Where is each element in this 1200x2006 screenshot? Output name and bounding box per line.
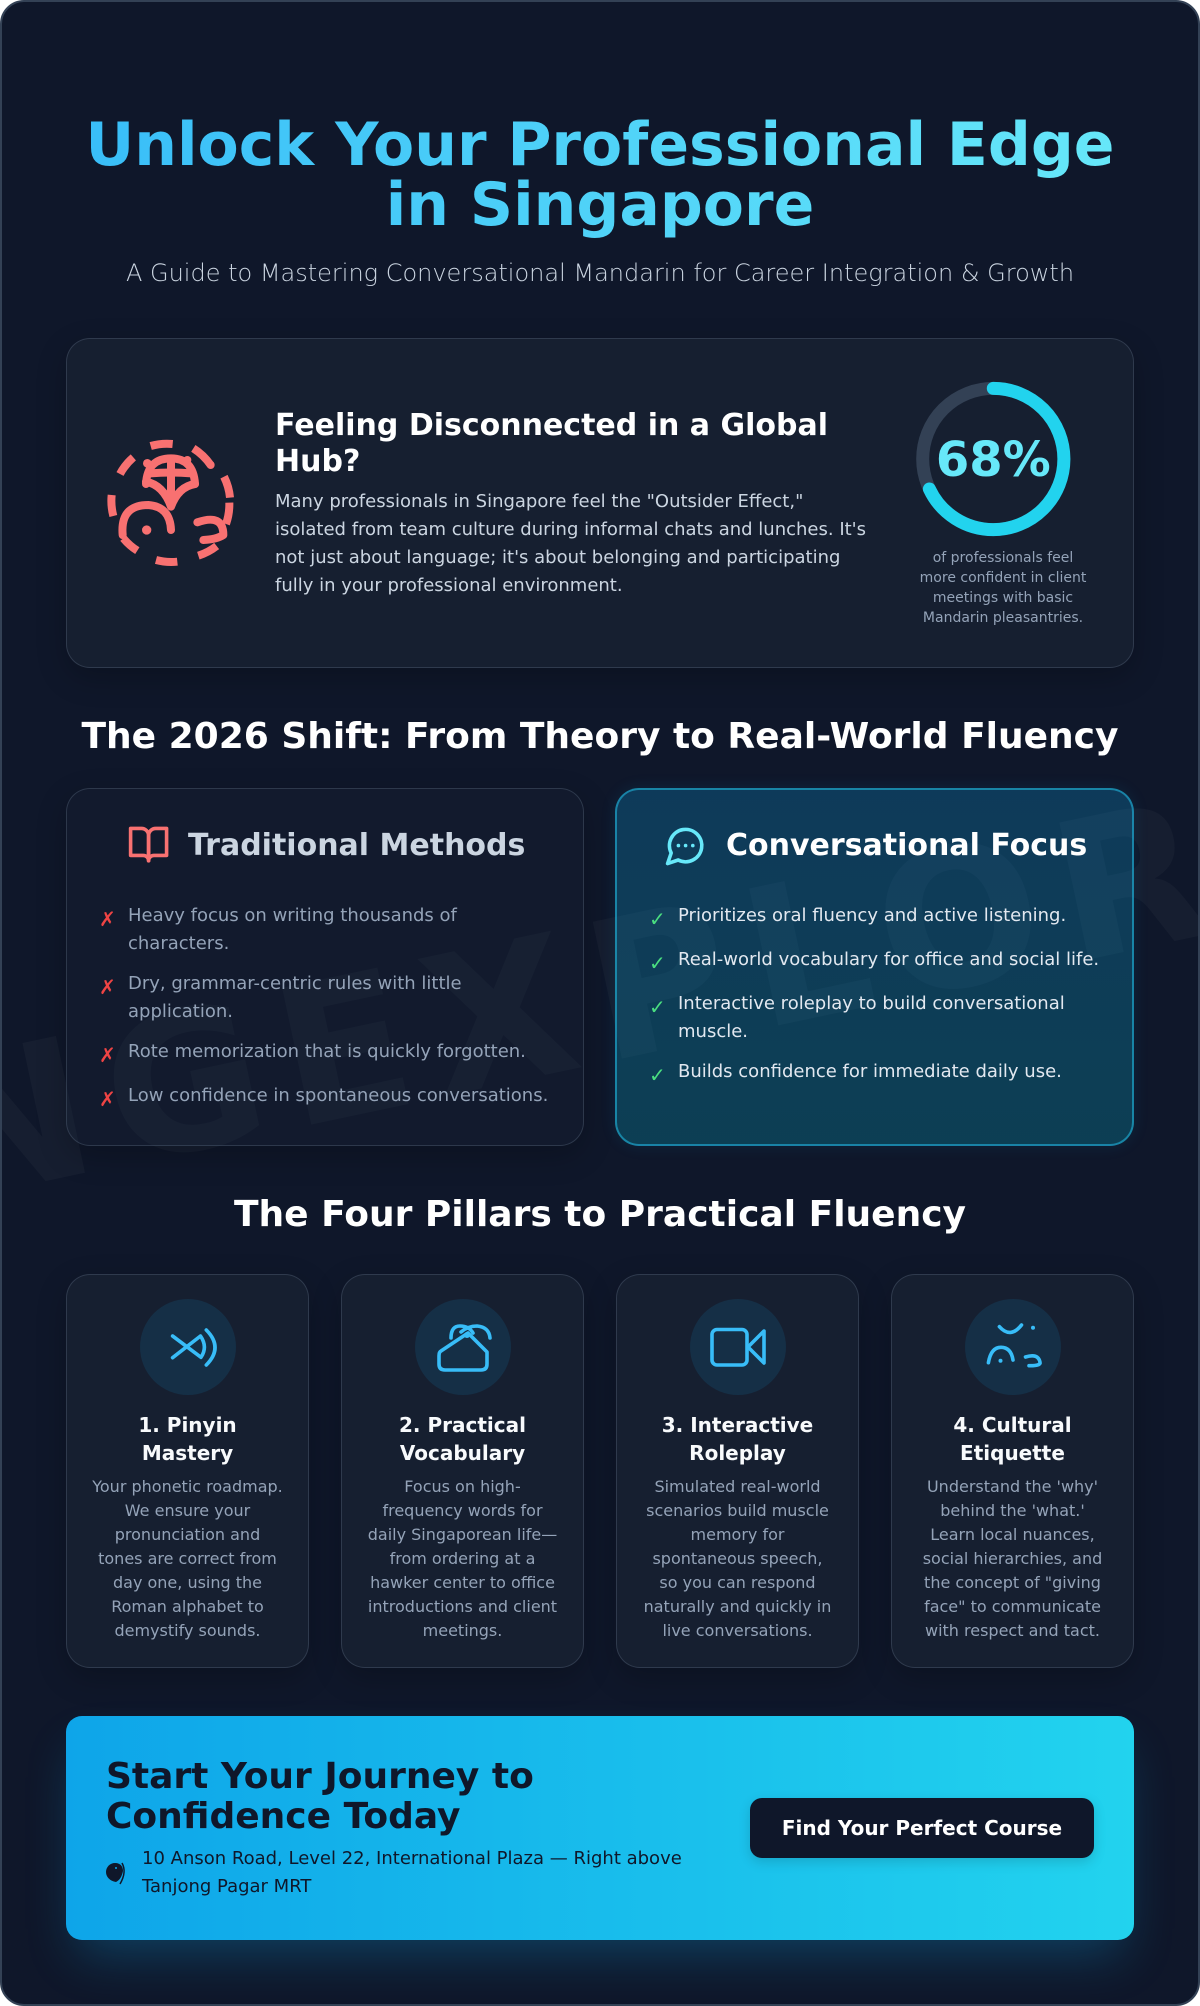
- CTA heading: [106, 1756, 534, 1837]
- pillar 2 text: introductions and client: [368, 1597, 557, 1616]
- icon circle 3: [690, 1299, 786, 1395]
- pillar 3 text: memory for: [691, 1525, 784, 1544]
- pillar 2 text: Focus on high-: [404, 1477, 521, 1496]
- pillar 3 title: 3. Interactive: [662, 1413, 813, 1437]
- pillar 1 title: [138, 1413, 237, 1465]
- panel heading: [275, 408, 828, 479]
- CTA heading: Start Your Journey to: [106, 1756, 534, 1797]
- pillar 1 text: We ensure your: [125, 1501, 250, 1520]
- button: find course: Find Your Perfect Course: [782, 1816, 1062, 1840]
- icon circle 2: [414, 1299, 510, 1395]
- icon: location pin: [106, 1862, 125, 1884]
- list: traditional drawbacks: ✗: [99, 907, 116, 931]
- list: traditional drawbacks: application.: [128, 1001, 233, 1022]
- icon circle 4: [964, 1299, 1060, 1395]
- panel: conversational focus: [615, 788, 1134, 1146]
- pillar 3 text: so you can respond: [659, 1573, 816, 1592]
- list: traditional drawbacks: ✗: [99, 975, 116, 999]
- list: traditional drawbacks: Rote memorization that is quickly forgotten.: [128, 1041, 526, 1062]
- pillar 1 text: Your phonetic roadmap.: [92, 1477, 283, 1496]
- list: conversational benefits: ✓: [649, 907, 666, 931]
- progress ring: 68%: [916, 382, 1070, 536]
- statistic caption: meetings with basic: [933, 590, 1073, 606]
- panel paragraph: not just about language; it's about belonging and participating: [275, 547, 840, 568]
- pillar 3 text: live conversations.: [662, 1621, 813, 1640]
- pillar 4 text: Learn local nuances,: [930, 1525, 1095, 1544]
- icon: disconnected people: [107, 440, 234, 566]
- list: conversational benefits: ✓: [649, 1063, 666, 1087]
- list: traditional drawbacks: [99, 905, 548, 1111]
- title: [66, 115, 1134, 249]
- pillar 3 title: Roleplay: [689, 1441, 786, 1465]
- pillar 4 text: behind the 'what.': [940, 1501, 1085, 1520]
- call to action banner: [66, 1716, 1134, 1940]
- list: conversational benefits: ✓: [649, 951, 666, 975]
- panel heading: Feeling Disconnected in a Global: [275, 408, 828, 443]
- list: conversational benefits: Prioritizes oral fluency and active listening.: [678, 905, 1066, 926]
- pillar 2 text: hawker center to office: [370, 1573, 555, 1592]
- heading: the 2026 shift: The 2026 Shift: From Theory to Real-World Fluency: [81, 716, 1118, 757]
- panel paragraph: Many professionals in Singapore feel the "Outsider Effect,": [275, 491, 803, 512]
- statistic caption: more confident in client: [920, 570, 1086, 586]
- pillar 4 text: face" to communicate: [924, 1597, 1101, 1616]
- address: [142, 1848, 682, 1897]
- statistic caption: [920, 550, 1086, 626]
- list: conversational benefits: Real-world vocabulary for office and social life.: [678, 949, 1099, 970]
- statistic caption: Mandarin pleasantries.: [923, 610, 1083, 626]
- subtitle: A Guide to Mastering Conversational Mandarin for Career Integration & Growth: [126, 259, 1074, 287]
- pillar 2 title: 2. Practical: [399, 1413, 526, 1437]
- pillar 2 text: daily Singaporean life—: [368, 1525, 557, 1544]
- pillar 3 text: scenarios build muscle: [646, 1501, 829, 1520]
- pillar 2 text: frequency words for: [382, 1501, 543, 1520]
- pillar 2 text: from ordering at a: [390, 1549, 535, 1568]
- icon: open book: [128, 826, 168, 863]
- pillar card 1: [66, 1274, 309, 1668]
- pillar 4 text: social hierarchies, and: [923, 1549, 1102, 1568]
- pillar 3 title: [662, 1413, 813, 1465]
- list: traditional drawbacks: ✗: [99, 1087, 116, 1111]
- pillar 4 title: [953, 1413, 1072, 1465]
- panel: traditional methods: [66, 788, 584, 1146]
- icon: cultural faces: [986, 1323, 1042, 1368]
- pillar 4 text: Understand the 'why': [927, 1477, 1098, 1496]
- icon: sound wave: [170, 1328, 217, 1367]
- list: traditional drawbacks: Low confidence in spontaneous conversations.: [128, 1085, 548, 1106]
- address: Tanjong Pagar MRT: [142, 1876, 311, 1897]
- statistic caption: of professionals feel: [933, 550, 1073, 566]
- pillar 1 text: day one, using the: [113, 1573, 262, 1592]
- list: conversational benefits: Builds confidence for immediate daily use.: [678, 1061, 1062, 1082]
- pillar 2 text: [368, 1477, 557, 1640]
- address: 10 Anson Road, Level 22, International Plaza — Right above: [142, 1848, 682, 1869]
- pillar 1 text: [92, 1477, 283, 1640]
- pillar 4 text: [923, 1477, 1102, 1640]
- list: traditional drawbacks: Heavy focus on writing thousands of: [128, 905, 457, 926]
- panel paragraph: isolated from team culture during informal chats and lunches. It's: [275, 519, 866, 540]
- icon: chat bubble: [666, 828, 704, 866]
- pillar 1 text: pronunciation and: [115, 1525, 260, 1544]
- pillar 1 title: Mastery: [142, 1441, 233, 1465]
- list: conversational benefits: muscle.: [678, 1021, 748, 1042]
- pillar 1 text: tones are correct from: [98, 1549, 277, 1568]
- pillar 3 text: naturally and quickly in: [644, 1597, 831, 1616]
- pillar 2 title: Vocabulary: [400, 1441, 525, 1465]
- pillar 4 title: Etiquette: [960, 1441, 1065, 1465]
- pillar 1 text: Roman alphabet to: [111, 1597, 264, 1616]
- title: Unlock Your Professional Edge: [86, 110, 1114, 180]
- list: conversational benefits: Interactive roleplay to build conversational: [678, 993, 1065, 1014]
- pillar card 2: [341, 1274, 584, 1668]
- pillar 1 title: 1. Pinyin: [138, 1413, 237, 1437]
- icon: video camera: [710, 1328, 766, 1367]
- panel paragraph: fully in your professional environment.: [275, 575, 623, 596]
- list: traditional drawbacks: Dry, grammar-centric rules with little: [128, 973, 462, 994]
- pillar 4 title: 4. Cultural: [953, 1413, 1072, 1437]
- heading: four pillars: The Four Pillars to Practical Fluency: [234, 1194, 966, 1235]
- pillar 2 text: meetings.: [423, 1621, 502, 1640]
- title: in Singapore: [386, 170, 814, 240]
- pillar 4 text: the concept of "giving: [924, 1573, 1101, 1592]
- panel paragraph: [275, 491, 866, 596]
- pillar 1 text: demystify sounds.: [114, 1621, 260, 1640]
- icon circle 1: [140, 1299, 236, 1395]
- progress ring: 68%: 68%: [936, 432, 1051, 488]
- pillar 4 text: with respect and tact.: [925, 1621, 1100, 1640]
- list: conversational benefits: [649, 905, 1099, 1087]
- heading: conversational focus: Conversational Focus: [726, 828, 1087, 863]
- list: traditional drawbacks: characters.: [128, 933, 229, 954]
- heading: traditional methods: Traditional Methods: [188, 828, 525, 863]
- pillar 2 title: [399, 1413, 526, 1465]
- list: conversational benefits: ✓: [649, 995, 666, 1019]
- icon: house: [437, 1324, 492, 1372]
- pillar 3 text: [644, 1477, 831, 1640]
- button: find course: [750, 1798, 1094, 1858]
- panel: problem statement: [66, 338, 1134, 668]
- pillar 3 text: spontaneous speech,: [652, 1549, 823, 1568]
- pillar 3 text: Simulated real-world: [654, 1477, 821, 1496]
- panel heading: Hub?: [275, 444, 360, 479]
- pillar card 4: [891, 1274, 1134, 1668]
- list: traditional drawbacks: ✗: [99, 1043, 116, 1067]
- CTA heading: Confidence Today: [106, 1796, 460, 1837]
- pillar card 3: [616, 1274, 859, 1668]
